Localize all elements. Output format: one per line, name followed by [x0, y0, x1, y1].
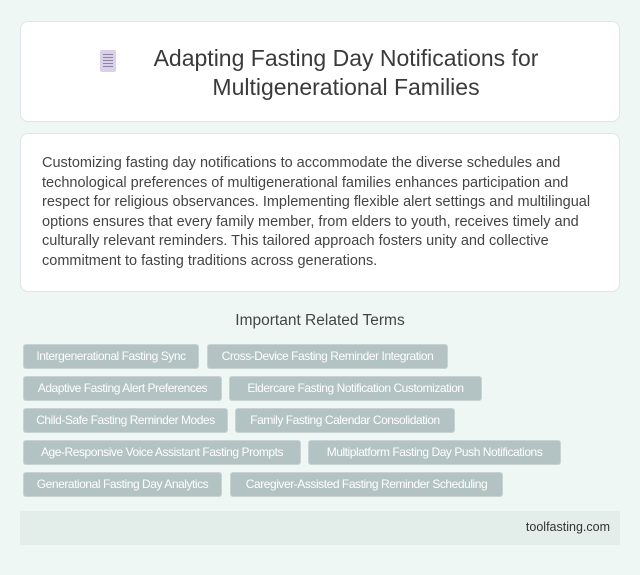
tag: Cross-Device Fasting Reminder Integration [222, 349, 433, 363]
icon: document scroll [100, 50, 116, 72]
title [154, 45, 538, 100]
tag [229, 376, 482, 401]
tags [23, 344, 561, 497]
tag: Child-Safe Fasting Reminder Modes [36, 413, 215, 427]
tag [23, 440, 301, 465]
heading: important related terms: Important Related Terms [235, 312, 405, 329]
tag: Adaptive Fasting Alert Preferences [38, 381, 207, 395]
description text: options ensures that every family member, from elders to youth, receives timely and [42, 214, 579, 230]
title: Multigenerational Families [212, 74, 480, 100]
tag: Family Fasting Calendar Consolidation [250, 413, 440, 427]
tag [23, 344, 199, 369]
tag [308, 440, 561, 465]
tag [235, 408, 455, 433]
tag [207, 344, 448, 369]
description text: culturally relevant reminders. This tailored approach fosters unity and collective [42, 233, 549, 249]
description text: respect for religious observances. Implementing flexible alert settings and multilingual [42, 194, 590, 210]
tag: Age-Responsive Voice Assistant Fasting Prompts [41, 445, 283, 459]
tag [23, 376, 222, 401]
title card [20, 21, 620, 122]
description text: commitment to fasting traditions across generations. [42, 252, 377, 268]
title: Adapting Fasting Day Notifications for [154, 45, 538, 71]
tag [230, 472, 503, 497]
tag: Generational Fasting Day Analytics [37, 477, 208, 491]
tag: Caregiver-Assisted Fasting Reminder Scheduling [246, 477, 487, 491]
description card [20, 133, 620, 292]
tag: Intergenerational Fasting Sync [36, 349, 186, 363]
footer [20, 511, 620, 545]
tag [23, 472, 222, 497]
tag [23, 408, 228, 433]
description text: Customizing fasting day notifications to accommodate the diverse schedules and [42, 155, 560, 171]
description text: technological preferences of multigenerational families enhances participation and [42, 174, 568, 190]
tag: Eldercare Fasting Notification Customization [247, 381, 464, 395]
footer text: toolfasting.com [526, 520, 610, 534]
tag: Multiplatform Fasting Day Push Notifications [327, 445, 542, 459]
description text [42, 155, 590, 268]
